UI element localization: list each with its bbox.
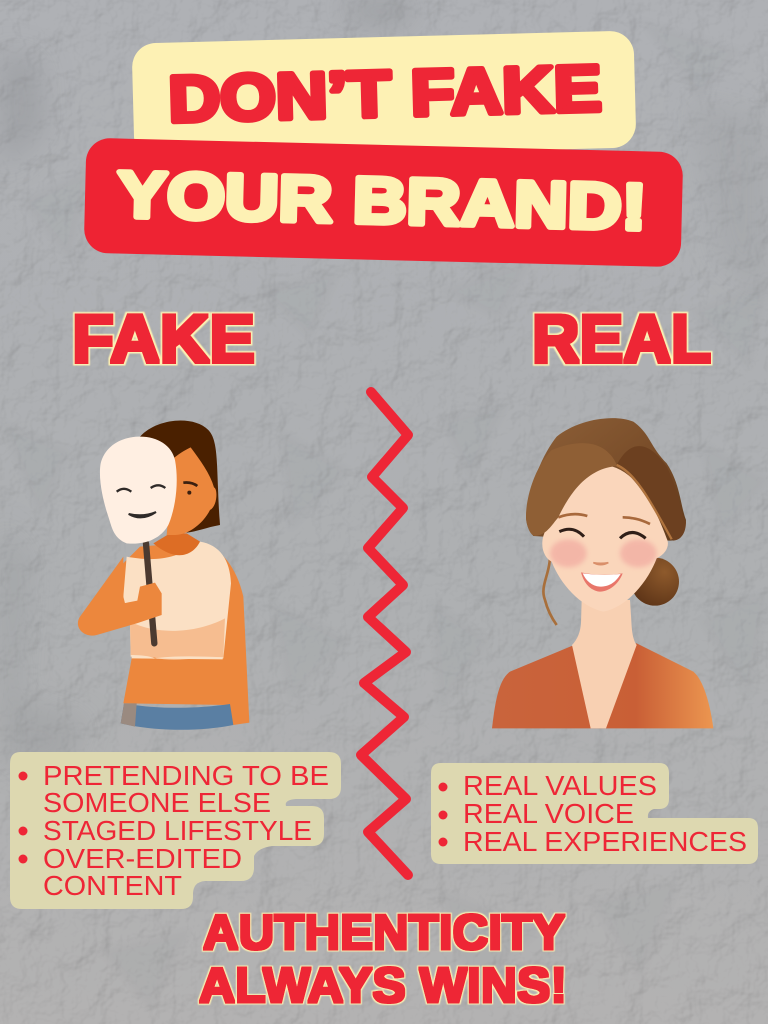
eye and brow: [183, 482, 197, 486]
nose: [593, 563, 608, 565]
mask face: [117, 485, 165, 492]
closed eyes: [559, 529, 646, 538]
cheeks: [550, 539, 587, 567]
bullet dots: [18, 772, 28, 780]
panel: real bullet list: REAL EXPERIENCES: [463, 826, 747, 857]
panel: real bullet list: REAL VOICE: [463, 798, 634, 829]
list text: REAL VALUES: [463, 770, 657, 801]
title banner: your brand: YOUR BRAND!: [117, 158, 647, 243]
title banner: don't fake: DON’T FAKE: [168, 51, 602, 136]
panel: fake bullet list: CONTENT: [43, 870, 182, 901]
panel: fake bullet list: OVER-EDITED: [43, 843, 242, 874]
list text: PRETENDING TO BE: [43, 760, 329, 791]
orange body and cape: [110, 542, 249, 725]
hair: [140, 421, 220, 533]
title banner: don't fake: [132, 30, 636, 161]
panel: real bullet list: [431, 763, 758, 864]
panel background: [431, 763, 758, 864]
neck: [153, 533, 200, 555]
back hair: [526, 418, 686, 541]
dress: [492, 643, 713, 728]
icon: person holding smiling mask: [78, 421, 249, 730]
hair sweep front: [526, 443, 617, 536]
bun: [631, 558, 679, 606]
neck and chest: [572, 600, 637, 728]
panel: fake bullet list: SOMEONE ELSE: [43, 787, 271, 818]
smile: [581, 572, 623, 592]
face: [167, 447, 216, 535]
mask: [100, 437, 177, 544]
closing line: authenticity: AUTHENTICITY: [203, 906, 565, 960]
panel background: [10, 752, 341, 909]
panel: fake bullet list: [10, 752, 341, 909]
hair highlight strand: [617, 465, 672, 539]
bullet dots: [438, 782, 448, 792]
face: [542, 465, 668, 612]
shirt: [123, 542, 231, 658]
loose strand: [543, 543, 557, 625]
title banner: your brand: [84, 138, 683, 267]
heading: fake: FAKE: [72, 301, 255, 377]
stick: [146, 543, 154, 643]
heading: real: REAL: [532, 301, 711, 377]
panel: fake bullet list: STAGED LIFESTYLE: [43, 815, 312, 846]
icon: smiling woman portrait: [492, 418, 713, 728]
eyebrows: [558, 514, 650, 524]
jeans: [121, 703, 233, 730]
closing line: always wins: ALWAYS WINS!: [199, 959, 567, 1013]
zigzag divider: [361, 392, 408, 875]
arm and hand: [78, 557, 162, 636]
